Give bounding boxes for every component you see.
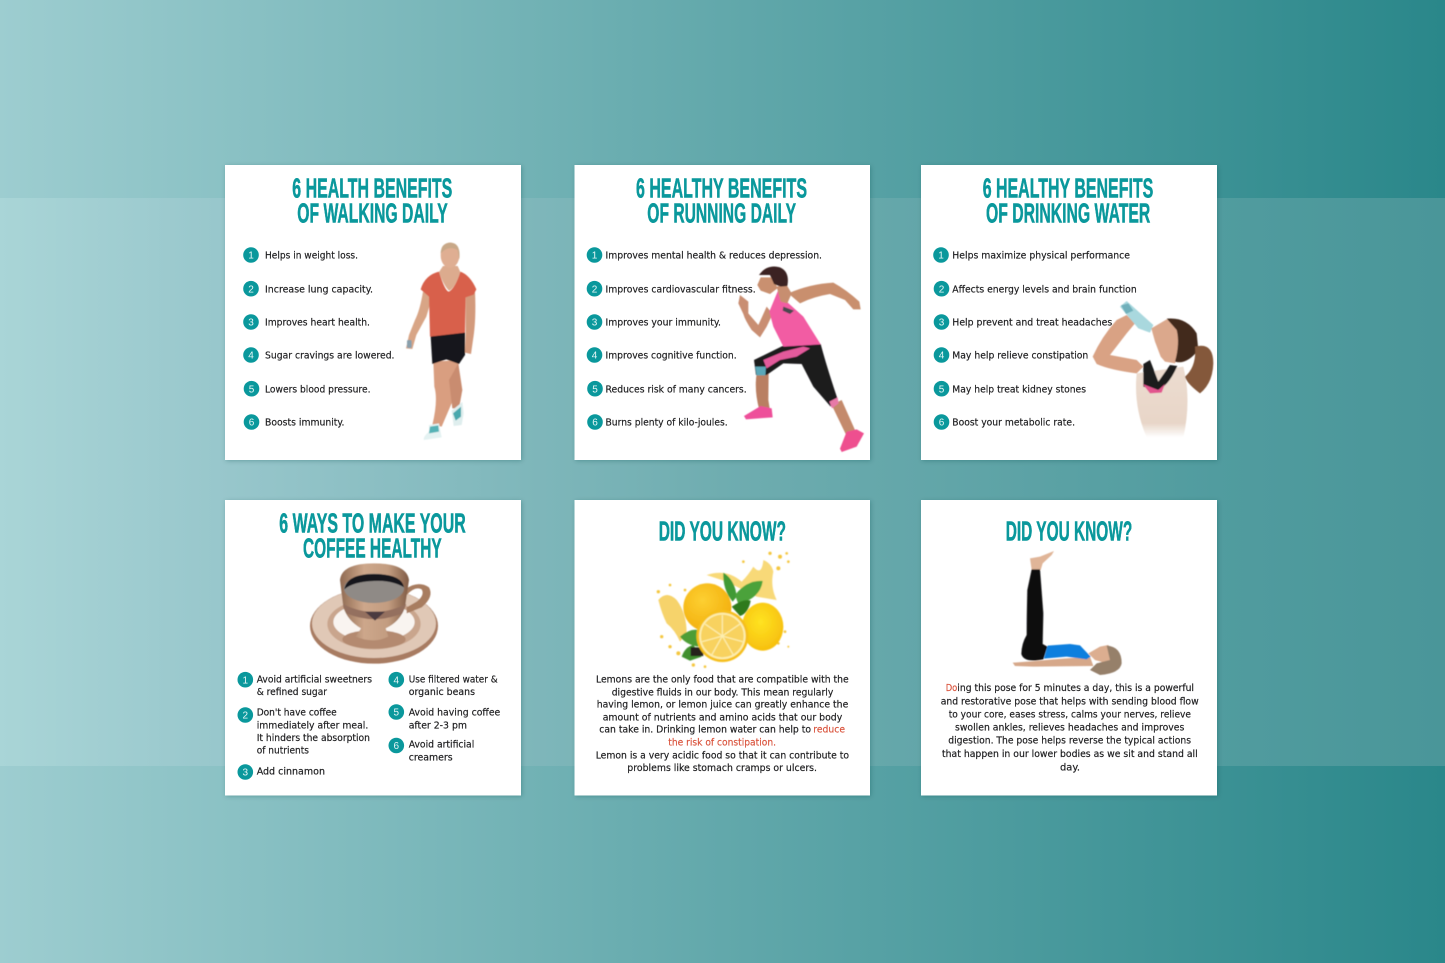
list: running benefits: [587, 247, 822, 430]
text: lemon facts: reduce: [813, 725, 845, 736]
text: lemon facts: can take in. Drinking lemon water can help to: [599, 725, 811, 736]
list: walking benefits: 5: [249, 384, 255, 395]
panel: drinking water benefits: [921, 165, 1217, 460]
list: coffee tips right column: 4: [394, 675, 400, 686]
heading: water: [983, 172, 1153, 228]
heading: water: 6 HEALTHY BENEFITS: [983, 172, 1153, 203]
list: running benefits: 1: [592, 251, 598, 262]
heading: did you know yoga: DID YOU KNOW?: [1006, 516, 1132, 547]
list: running benefits: Improves your immunity.: [606, 318, 721, 329]
text: yoga pose facts: that happen in our lower bodies as we sit and stand all: [942, 749, 1198, 760]
list: walking benefits: 1: [248, 251, 254, 262]
illustration: woman drinking water: [1093, 301, 1213, 437]
list: running benefits: 3: [592, 318, 598, 329]
text: yoga pose facts: ing this pose for 5 minutes a day, this is a powerful: [957, 683, 1194, 694]
list: coffee tips left column: 2: [243, 711, 249, 722]
illustration: woman walking: [406, 243, 476, 440]
list: running benefits: 5: [592, 384, 598, 395]
list: walking benefits: Helps in weight loss.: [265, 251, 358, 262]
list: running benefits: 2: [592, 284, 598, 295]
text: lemon facts: having lemon, or lemon juice can greatly enhance the: [597, 700, 848, 711]
list: water benefits: Help prevent and treat headaches: [952, 318, 1112, 329]
list: walking benefits: Increase lung capacity.: [265, 284, 373, 295]
text: lemon facts: digestive fluids in our body. This mean regularly: [612, 687, 834, 698]
text: yoga pose facts: digestion. The pose helps reverse the typical actions: [948, 736, 1191, 747]
list: running benefits: Improves mental health & reduces depression.: [606, 251, 822, 262]
text: lemon facts: Lemon is a very acidic food so that it can contribute to: [596, 750, 849, 761]
text: lemon facts: problems like stomach cramps or ulcers.: [627, 763, 817, 774]
list: coffee tips right column: after 2-3 pm: [409, 721, 467, 732]
list: running benefits: Burns plenty of kilo-joules.: [606, 418, 728, 429]
list: coffee tips left column: 3: [243, 768, 249, 779]
list: walking benefits: [243, 247, 394, 430]
panel: running benefits: [574, 165, 870, 460]
list: coffee tips right column: 5: [394, 708, 400, 719]
illustration: lemons with splash: [657, 552, 790, 668]
list: walking benefits: 4: [248, 351, 254, 362]
list: water benefits: May help treat kidney stones: [952, 384, 1086, 395]
heading: running: 6 HEALTHY BENEFITS: [636, 172, 807, 203]
list: walking benefits: Lowers blood pressure.: [265, 384, 370, 395]
heading: walking: 6 HEALTH BENEFITS: [292, 172, 452, 203]
heading: coffee: 6 WAYS TO MAKE YOUR: [279, 508, 466, 539]
list: walking benefits: 3: [248, 318, 254, 329]
list: walking benefits: Sugar cravings are lowered.: [265, 351, 394, 362]
text: lemon facts: the risk of constipation.: [668, 738, 776, 749]
list: water benefits: [933, 247, 1137, 430]
panel: did you know yoga pose: [921, 500, 1217, 796]
list: water benefits: 3: [939, 318, 945, 329]
list: coffee tips right column: [388, 672, 500, 764]
list: walking benefits: 2: [248, 284, 254, 295]
text: yoga pose facts: [941, 683, 1199, 773]
list: running benefits: Improves cognitive function.: [606, 351, 737, 362]
text: yoga pose facts: Do: [946, 683, 957, 694]
list: coffee tips right column: Avoid having coffee: [409, 708, 500, 719]
text: lemon facts: amount of nutrients and amino acids that our body: [603, 712, 843, 723]
list: coffee tips left column: [238, 672, 372, 780]
text: yoga pose facts: to your core, eases stress, calms your nerves, relieve: [949, 709, 1191, 720]
list: coffee tips right column: organic beans: [409, 687, 475, 698]
text: yoga pose facts: swollen ankles, relieves headaches and improves: [955, 723, 1184, 734]
list: coffee tips right column: creamers: [409, 753, 453, 764]
list: coffee tips left column: of nutrients: [257, 746, 309, 757]
heading: walking: [292, 172, 452, 228]
list: coffee tips right column: Avoid artificial: [409, 740, 474, 751]
heading: running: [636, 172, 807, 228]
heading: walking: OF WALKING DAILY: [297, 197, 448, 228]
panel: healthy coffee: [225, 500, 521, 796]
list: water benefits: 6: [939, 418, 945, 429]
list: coffee tips right column: Use filtered water &: [409, 675, 498, 686]
text: lemon facts: [596, 675, 849, 774]
list: running benefits: Improves cardiovascular fitness.: [606, 284, 756, 295]
list: walking benefits: Improves heart health.: [265, 318, 370, 329]
list: running benefits: Reduces risk of many cancers.: [606, 384, 747, 395]
list: water benefits: May help relieve constipation: [952, 351, 1088, 362]
panel: did you know lemons: [574, 500, 870, 796]
list: coffee tips left column: immediately after meal.: [257, 721, 368, 732]
text: lemon facts: Lemons are the only food that are compatible with the: [596, 675, 849, 686]
panel: walking benefits: [225, 165, 521, 460]
list: walking benefits: Boosts immunity.: [265, 418, 344, 429]
list: coffee tips left column: Avoid artificial sweetners: [257, 675, 372, 686]
heading: coffee: [279, 508, 466, 563]
list: water benefits: 1: [938, 251, 944, 262]
heading: did you know lemons: DID YOU KNOW?: [659, 516, 786, 547]
list: coffee tips right column: 6: [394, 741, 400, 752]
list: coffee tips left column: It hinders the absorption: [257, 733, 370, 744]
list: coffee tips left column: 1: [243, 675, 249, 686]
list: water benefits: Boost your metabolic rate.: [952, 418, 1075, 429]
list: water benefits: 2: [939, 284, 945, 295]
illustration: woman running: [738, 267, 864, 452]
heading: running: OF RUNNING DAILY: [647, 197, 796, 228]
text: yoga pose facts: day.: [1060, 762, 1080, 773]
list: coffee tips left column: Don't have coffee: [257, 708, 337, 719]
list: water benefits: 5: [939, 384, 945, 395]
text: yoga pose facts: and restorative pose that helps with sending blood flow: [941, 697, 1199, 708]
illustration: coffee cup and saucer: [310, 563, 438, 664]
list: water benefits: 4: [939, 351, 945, 362]
heading: coffee: COFFEE HEALTHY: [303, 532, 442, 563]
list: water benefits: Helps maximize physical performance: [952, 251, 1130, 262]
list: water benefits: Affects energy levels and brain function: [952, 284, 1137, 295]
illustration: legs-up yoga pose: [1013, 551, 1122, 675]
list: running benefits: 6: [592, 418, 598, 429]
list: walking benefits: 6: [249, 418, 255, 429]
heading: water: OF DRINKING WATER: [986, 197, 1150, 228]
list: coffee tips left column: Add cinnamon: [257, 767, 325, 778]
list: running benefits: 4: [592, 351, 598, 362]
list: coffee tips left column: & refined sugar: [257, 687, 327, 698]
